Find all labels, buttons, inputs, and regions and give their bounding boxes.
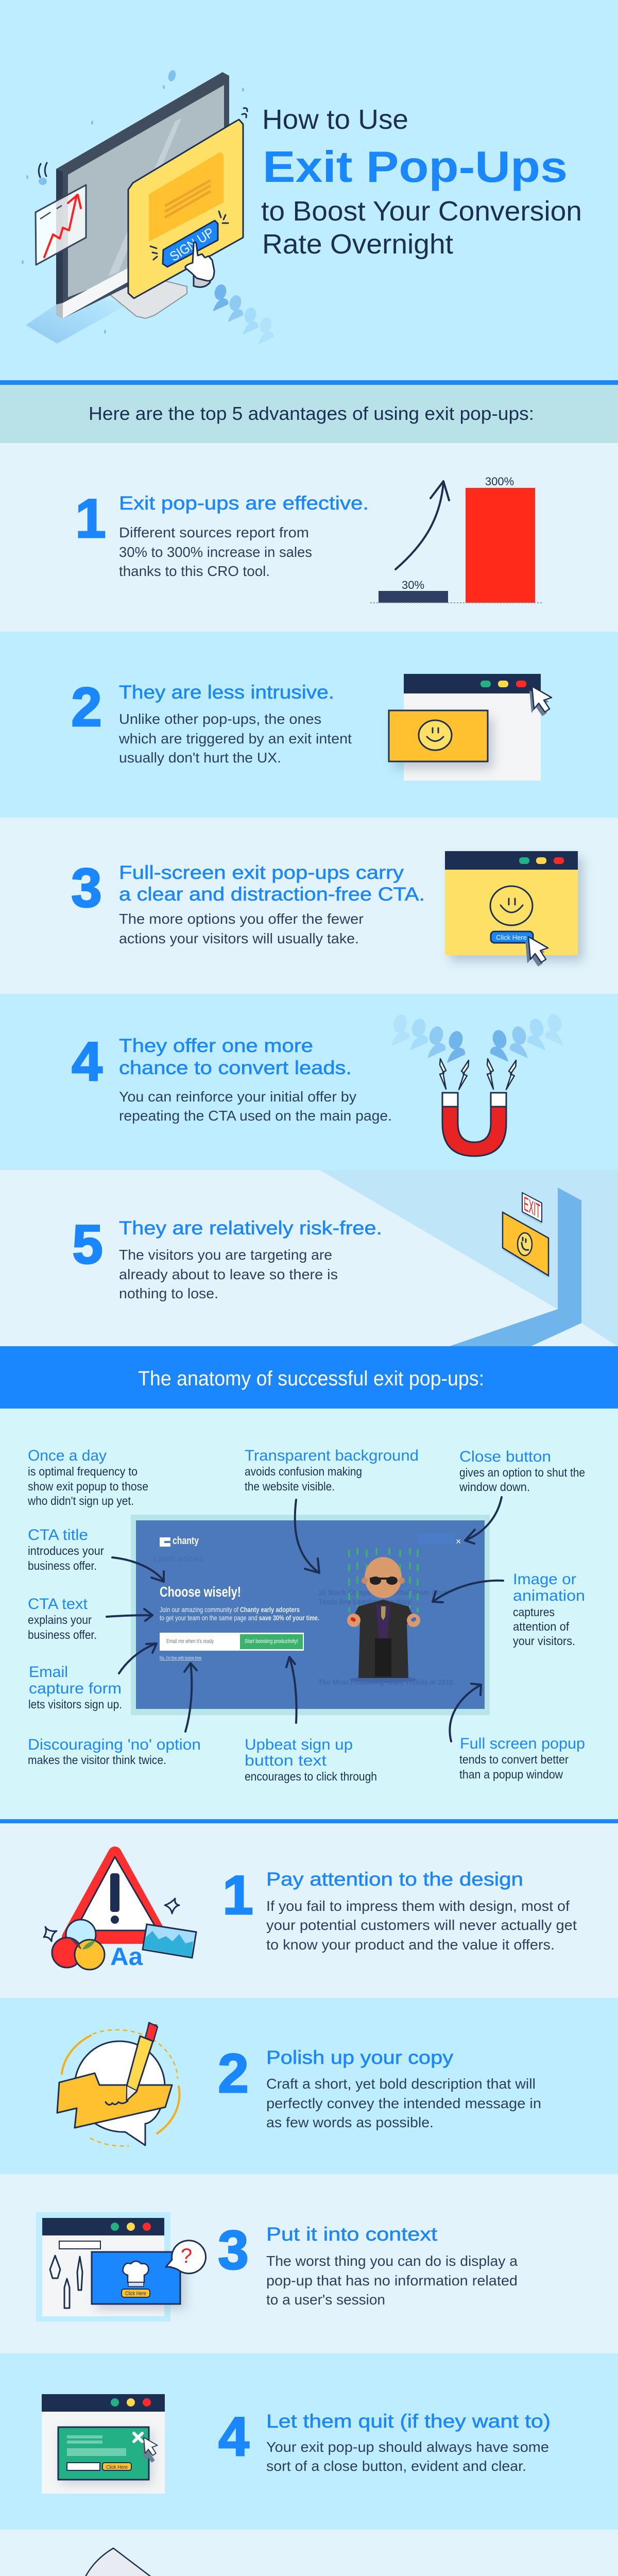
button label: sign up: SIGN UP	[167, 225, 217, 264]
callout: transparent background: the website visible.	[245, 1480, 335, 1493]
icon: warning triangle with design elements	[44, 1853, 196, 1971]
panel: tip 4: sort of a close button, evident and clear.	[266, 2458, 526, 2474]
panel: tip 2: Polish up your copy	[266, 2047, 454, 2068]
panel: advantage 3: The more options you offer the fewer	[119, 911, 364, 927]
title: Rate Overnight	[262, 229, 453, 260]
panel: tip 1: 1	[222, 1864, 253, 1926]
callout: transparent background	[245, 1447, 419, 1573]
panel: anatomy of exit pop-ups	[0, 1409, 618, 1819]
logo: chanty: chanty	[173, 1535, 199, 1547]
panel: tip 2: as few words as possible.	[266, 2114, 434, 2130]
email capture form: Email me when it's ready	[166, 1638, 214, 1645]
popup screenshot: Tools Are Leading the Way	[318, 1598, 411, 1606]
panel: advantage 5: The visitors you are targeting are	[119, 1247, 332, 1263]
panel: tip 4: Your exit pop-up should always have some	[266, 2439, 549, 2455]
callout: image or animation: Image or	[513, 1571, 576, 1588]
panel: tip 3: The worst thing you can do is display a	[266, 2253, 518, 2269]
logo: chanty	[160, 1535, 199, 1547]
callout: email capture form: Email	[29, 1664, 68, 1681]
heading: anatomy band: The anatomy of successful exit pop-ups:	[138, 1367, 484, 1390]
callout: full screen popup: tends to convert better	[459, 1753, 569, 1766]
icon: warning triangle with design elements: Aa	[110, 1943, 143, 1971]
panel: tip 4: 4	[218, 2405, 249, 2467]
panel: tip 1: Pay attention to the design	[266, 1869, 523, 1890]
panel: advantage 1: thanks to this CRO tool.	[119, 563, 270, 579]
bar chart: 30% vs 300%: 30%	[402, 579, 424, 591]
callout: image or animation	[433, 1571, 585, 1648]
title: Exit Pop-Ups	[263, 143, 568, 192]
panel: advantage 1: Different sources report from	[119, 524, 309, 540]
callout: upbeat sign up button text: Upbeat sign up	[245, 1736, 353, 1753]
panel: tip 4	[0, 2353, 618, 2530]
callout: image or animation: your visitors.	[513, 1634, 575, 1648]
panel: tip 5	[0, 2530, 618, 2576]
panel: advantage 4: You can reinforce your initial offer by	[119, 1089, 356, 1105]
panel: advantage 2: Unlike other pop-ups, the ones	[119, 711, 321, 727]
callout: cta title: business offer.	[28, 1559, 97, 1572]
panel: tip 1: If you fail to impress them with design, most of	[266, 1898, 570, 1914]
panel: advantage 4: repeating the CTA used on the main page.	[119, 1108, 392, 1124]
illustration: exit sign and pop-up on wall	[503, 1192, 548, 1278]
panel: advantage 3: Full-screen exit pop-ups carry	[119, 862, 404, 883]
popup screenshot	[131, 1515, 490, 1715]
callout: cta text	[28, 1596, 152, 1641]
popup screenshot: The Most Promising Team Trends in 2018	[318, 1678, 453, 1687]
panel: advantage 5: nothing to lose.	[119, 1285, 218, 1301]
illustration: pop-up with close button: Click Here	[106, 2465, 128, 2470]
callout: once a day: show exit popup to those	[28, 1480, 148, 1493]
panel: advantage 5: 5	[72, 1213, 103, 1275]
callout: image or animation: captures	[513, 1605, 555, 1619]
callout: full screen popup: than a popup window	[459, 1768, 563, 1781]
illustration: calendar page flip	[52, 2548, 192, 2576]
character with sunglasses	[347, 1548, 420, 1683]
panel: tip 2: Craft a short, yet bold description that will	[266, 2076, 536, 2092]
bar chart: 30% vs 300%: 300%	[485, 475, 514, 488]
panel: advantage 4: 4	[72, 1030, 102, 1092]
illustration: window with chef pop-up: ?	[181, 2245, 192, 2267]
bar chart: 30% vs 300%	[370, 475, 542, 603]
callout: close button: gives an option to shut the	[459, 1466, 585, 1479]
popup screenshot: No, I'm fine with losing time	[160, 1655, 201, 1660]
panel: tip 2: 2	[218, 2042, 249, 2104]
callout: full screen popup: Full screen popup	[460, 1735, 585, 1752]
callout: once a day: who didn't sign up yet.	[27, 1494, 134, 1507]
callout: discouraging no option: makes the visitor think twice.	[28, 1753, 166, 1767]
panel: tip 3: to a user's session	[266, 2292, 385, 2308]
panel: tip 1	[0, 1823, 618, 1998]
callout: upbeat sign up button text	[245, 1657, 377, 1783]
callout: cta title	[28, 1527, 164, 1582]
panel: advantage 5: already about to leave so there is	[119, 1266, 338, 1282]
popup screenshot: 10 Slack Competitors: What Team Chat	[318, 1588, 447, 1597]
callout: once a day: is optimal frequency to	[28, 1465, 138, 1478]
panel: advantage 5: They are relatively risk-free.	[119, 1217, 382, 1239]
panel: tip 3: pop-up that has no information related	[266, 2273, 518, 2289]
panel: tip 2: perfectly convey the intended message in	[266, 2095, 541, 2111]
email capture form: Start boosting productivity!	[245, 1638, 298, 1645]
panel: tip 3: Put it into context	[266, 2224, 438, 2245]
callout: upbeat sign up button text: button text	[245, 1752, 327, 1769]
callout: close button: window down.	[459, 1480, 530, 1494]
popup screenshot: to get your team on the same page and save 30% of your time.	[160, 1614, 319, 1622]
panel: advantage 4	[0, 994, 618, 1170]
callout: upbeat sign up button text: encourages to click through	[245, 1770, 377, 1783]
panel: advantage 1	[0, 443, 618, 632]
callout: cta title: CTA title	[28, 1527, 88, 1544]
illustration: full-screen pop-up: Click Here	[496, 934, 527, 941]
callout: cta title: introduces your	[28, 1544, 104, 1557]
callout: email capture form: capture form	[29, 1680, 122, 1697]
panel: hero header	[0, 0, 618, 380]
callout: once a day	[27, 1447, 148, 1507]
illustration: window with chef pop-up	[36, 2212, 206, 2321]
illustration: window with chef pop-up: Click Here	[125, 2291, 146, 2297]
email capture form	[160, 1633, 304, 1651]
callout: image or animation: attention of	[513, 1620, 570, 1633]
illustration: magnet attracting people	[391, 1012, 563, 1156]
title: to Boost Your Conversion	[261, 196, 582, 227]
callout: discouraging no option: Discouraging 'no' option	[28, 1736, 201, 1753]
panel: advantage 4: chance to convert leads.	[119, 1057, 352, 1078]
popup screenshot: Join our amazing community of Chanty early adopters	[160, 1605, 300, 1614]
callout: full screen popup	[450, 1684, 585, 1781]
callout: email capture form: lets visitors sign up.	[28, 1698, 122, 1711]
callout: cta text: explains your	[28, 1613, 92, 1626]
callout: image or animation: animation	[513, 1587, 585, 1604]
panel: tip 3	[0, 2174, 618, 2353]
panel: advantage 2: They are less intrusive.	[119, 682, 334, 703]
popup screenshot: ×	[456, 1536, 461, 1547]
panel: advantage 2	[0, 632, 618, 818]
heading: top 5 advantages	[0, 385, 618, 443]
panel: tip 4: Let them quit (if they want to)	[266, 2411, 551, 2432]
panel: tip 2	[0, 1998, 618, 2174]
title	[261, 104, 582, 260]
callout: close button	[459, 1448, 585, 1544]
illustration: exit sign and pop-up on wall: EXIT	[524, 1192, 540, 1223]
heading: anatomy band	[0, 1346, 618, 1409]
panel: advantage 2: which are triggered by an exit intent	[118, 731, 352, 747]
panel: tip 3: 3	[218, 2219, 249, 2281]
callout: once a day: Once a day	[28, 1447, 107, 1464]
panel: advantage 3: actions your visitors will usually take.	[119, 930, 359, 946]
panel: advantage 3: 3	[71, 857, 102, 919]
callout: discouraging no option	[28, 1663, 201, 1767]
panel: advantage 1: 1	[75, 487, 106, 549]
popup screenshot: Choose wisely!	[160, 1584, 241, 1600]
panel: advantage 4: They offer one more	[119, 1035, 313, 1056]
illustration: full-screen pop-up	[445, 851, 583, 967]
heading: top 5 advantages: Here are the top 5 advantages of using exit pop-ups:	[89, 403, 534, 424]
panel: advantage 3: a clear and distraction-free CTA.	[119, 884, 425, 905]
illustration: pop-up with close button	[42, 2394, 165, 2494]
panel: advantage 1: 30% to 300% increase in sales	[119, 544, 312, 560]
panel: advantage 5	[0, 1170, 618, 1347]
callout: transparent background: avoids confusion making	[245, 1465, 362, 1478]
panel: advantage 2: 2	[71, 676, 102, 738]
panel: advantage 1: Exit pop-ups are effective.	[119, 493, 369, 514]
callout: email capture form	[28, 1643, 157, 1711]
title: How to Use	[262, 104, 408, 135]
panel: advantage 2: usually don't hurt the UX.	[119, 750, 281, 766]
illustration: window with small pop-up	[389, 674, 552, 781]
popup screenshot: Latest articles	[153, 1555, 203, 1564]
panel: tip 1: to know your product and the value it offers.	[266, 1937, 555, 1953]
illustration: monitor with exit pop-up	[22, 70, 273, 344]
panel: tip 1: your potential customers will never actually get	[266, 1917, 577, 1933]
panel: advantage 3	[0, 818, 618, 994]
callout: close button: Close button	[459, 1448, 551, 1465]
callout: transparent background: Transparent background	[245, 1447, 419, 1464]
icon: speech bubble with pencil and ribbon	[57, 2022, 179, 2146]
callout: cta text: CTA text	[28, 1596, 88, 1613]
callout: cta text: business offer.	[28, 1628, 97, 1641]
